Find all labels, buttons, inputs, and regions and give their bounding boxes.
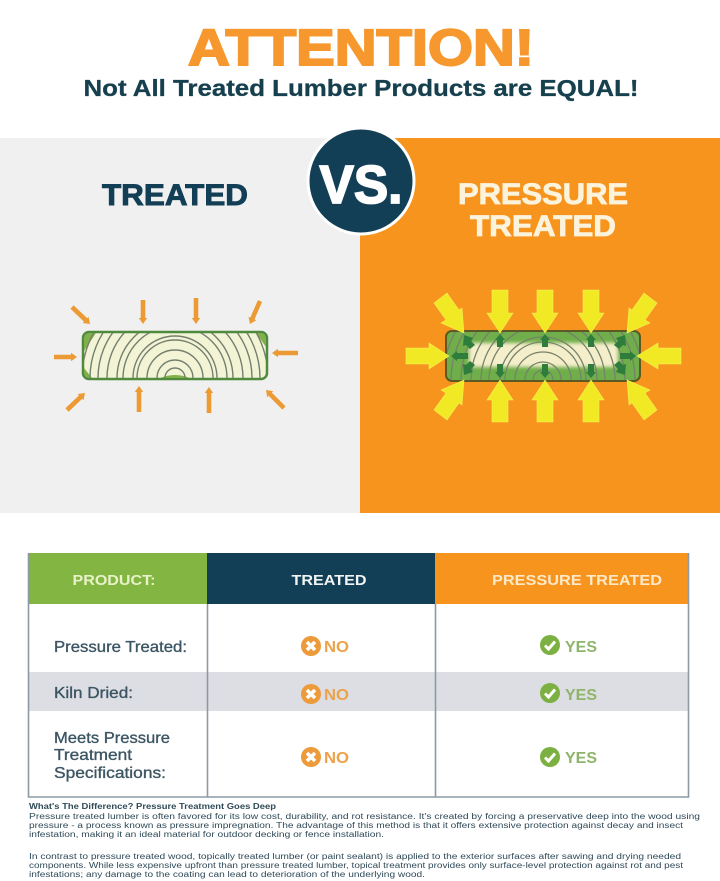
yes marks [540, 635, 597, 767]
no marks [301, 636, 349, 767]
panel: treated [0, 138, 360, 513]
heading: treated: TREATED [102, 179, 248, 212]
header: product: PRODUCT: [72, 573, 156, 589]
arrows: outward treated [54, 298, 298, 413]
row labels [54, 639, 187, 782]
explanatory text: What's The Difference? Pressure Treatment Goes Deep [29, 802, 276, 811]
yes marks: YES [565, 687, 597, 704]
comparison table [28, 553, 689, 797]
badge: VS.: VS. [320, 155, 402, 215]
yes marks: YES [565, 750, 597, 767]
panel: pressure treated: TREATED [470, 210, 616, 243]
explanatory text: pressure - a process known as pressure impregnation. The advantage of this method is that it offers extensive protection against decay and insect [29, 821, 684, 830]
header: pressure treated [435, 553, 689, 604]
arrows: inward pressure treated [406, 290, 681, 422]
explanatory text [29, 802, 700, 879]
no marks: NO [324, 750, 349, 767]
panel: pressure treated [360, 138, 720, 513]
yes marks: YES [565, 639, 597, 656]
header: pressure treated: PRESSURE TREATED [492, 573, 662, 589]
explanatory text: Pressure treated lumber is often favored for its low cost, durability, and rot resistance. It's created by forcing a preservative deep into the wood using [29, 812, 700, 821]
explanatory text: components. While less expensive upfront than pressure treated lumber, topical treatment provides only surface-level protection against rot and pest [29, 861, 684, 870]
wood cross-section: treated [82, 330, 268, 380]
header: treated [207, 553, 435, 604]
wood cross-section: pressure treated [406, 290, 682, 422]
explanatory text: infestation, making it an ideal material for outdoor decking or fence installation. [29, 830, 384, 839]
row highlight: kiln dried [28, 672, 689, 711]
row labels: Meets Pressure [54, 730, 170, 747]
header: treated: TREATED [292, 573, 366, 589]
row labels: Specifications: [54, 765, 166, 782]
header: product [28, 553, 207, 604]
title: ATTENTION! [188, 19, 534, 76]
no marks: NO [324, 687, 349, 704]
badge: VS. [308, 128, 414, 234]
row labels: Pressure Treated: [54, 639, 187, 656]
explanatory text: In contrast to pressure treated wood, topically treated lumber (or paint sealant) is applied to the exterior surfaces after sawing and drying needed [29, 852, 681, 861]
row labels: Kiln Dried: [54, 685, 133, 702]
title [84, 19, 638, 101]
subtitle: Not All Treated Lumber Products are EQUAL! [84, 75, 638, 101]
heading: pressure treated: PRESSURE [458, 178, 628, 211]
small inner arrows [451, 334, 636, 378]
row labels: Treatment [54, 747, 133, 764]
explanatory text: infestations; any damage to the coating can lead to deterioration of the underlying wood. [29, 870, 425, 879]
no marks: NO [324, 639, 349, 656]
